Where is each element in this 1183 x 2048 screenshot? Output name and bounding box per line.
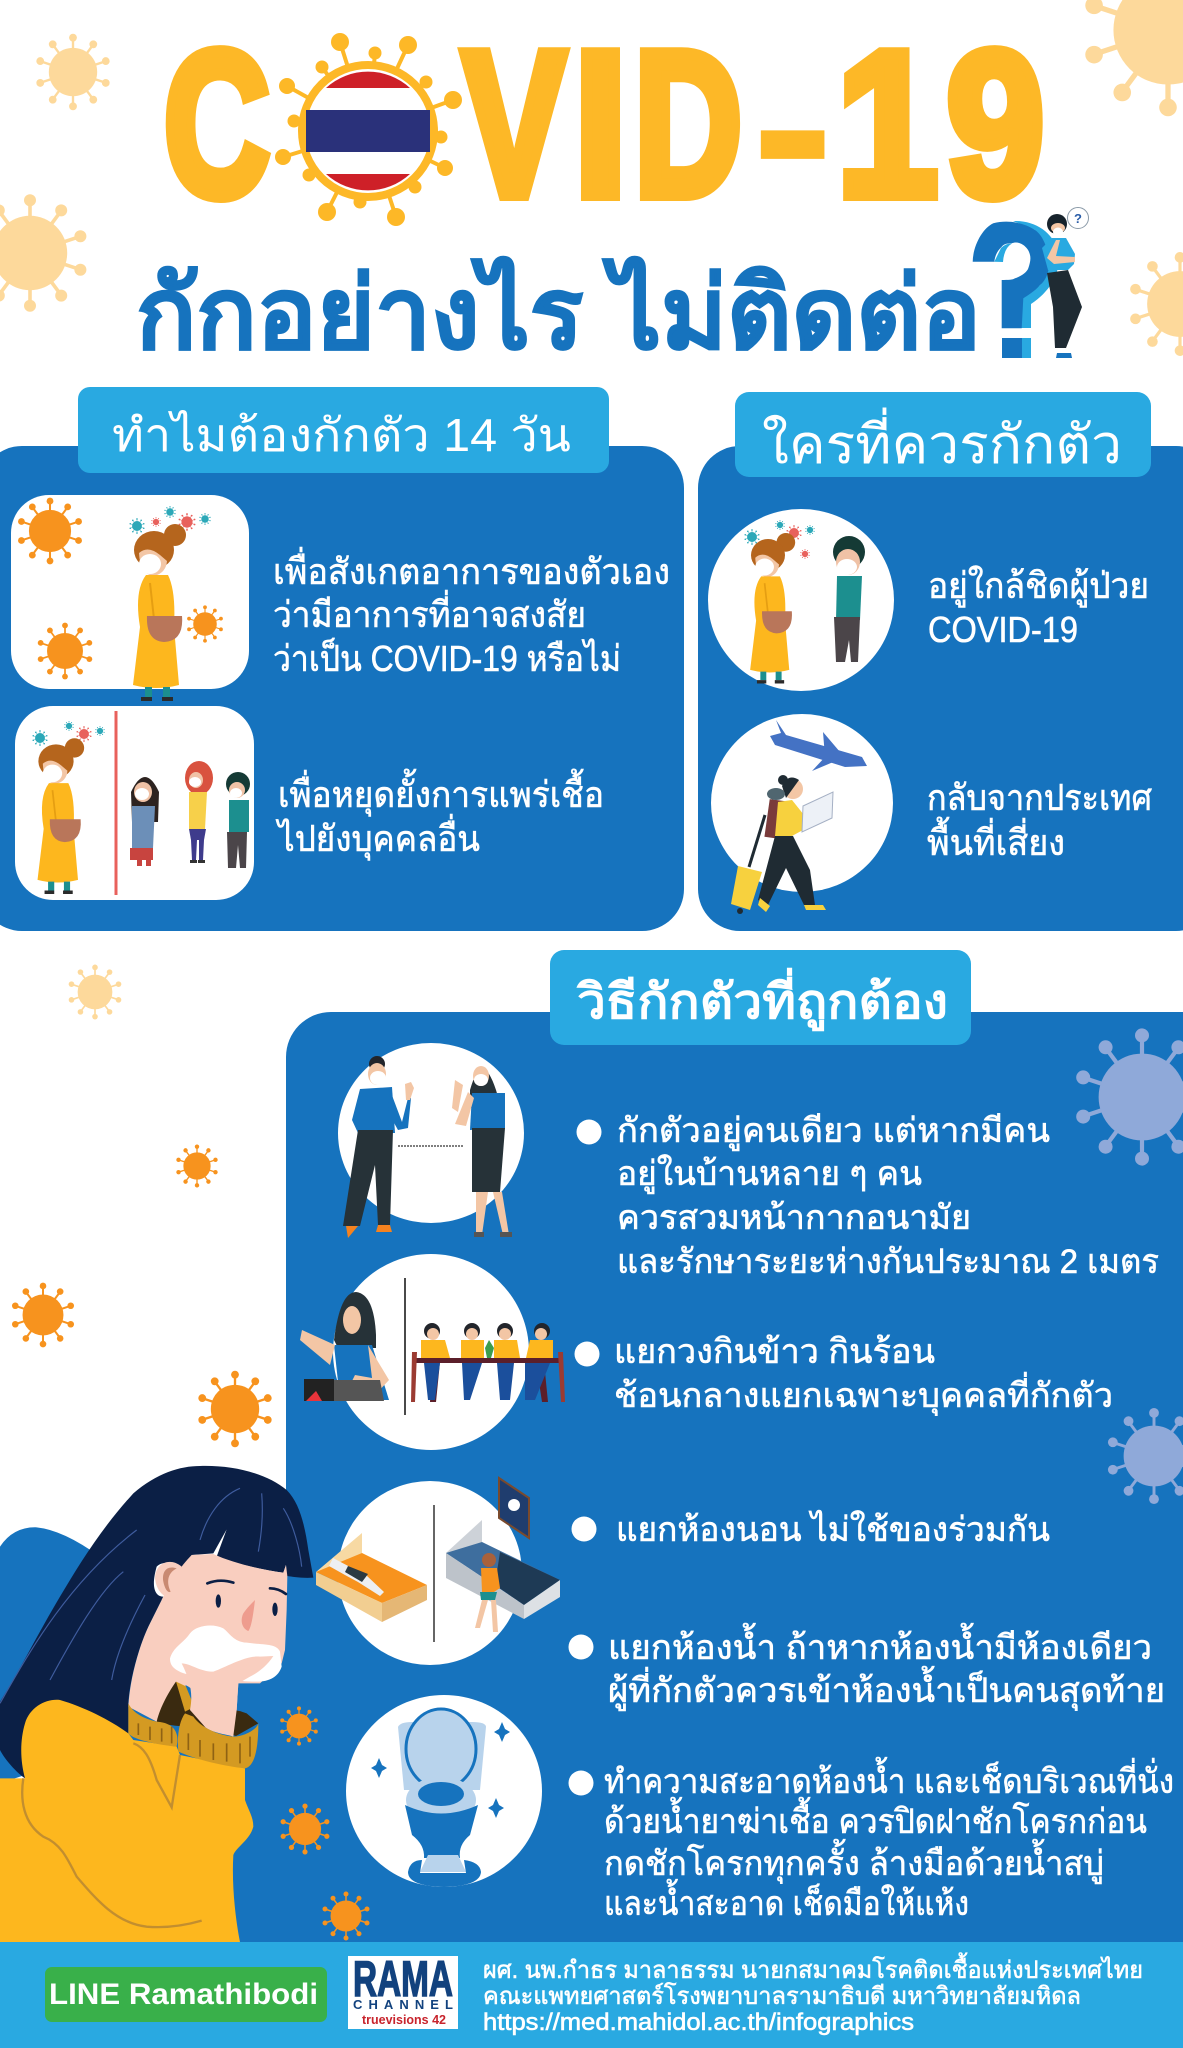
text: return from risk area: กลับจากประเทศ (927, 777, 1152, 818)
text: stop spread: เพื่อหยุดยั้งการแพร่เชื้อ (278, 768, 604, 817)
text: stay alone: และรักษาระยะห่างกันประมาณ 2 เมตร (617, 1243, 1159, 1281)
text: stay alone (576, 1112, 1159, 1281)
icon circle: close contact (708, 509, 894, 691)
icon: question mark and woman (973, 208, 1088, 358)
logo: Rama Channel: CHANNEL (353, 1997, 453, 2012)
text: observe symptoms: เพื่อสังเกตอาการของตัวเอง (273, 547, 670, 592)
figure: cooking woman (300, 1292, 389, 1401)
text: clean bathroom: กดชักโครกทุกครั้ง ล้างมือด้วยน้ำสบู่ (604, 1839, 1104, 1884)
figure: traveller (731, 775, 833, 914)
figure: woman (452, 1066, 512, 1237)
title: COVID-19 (164, 9, 1044, 242)
panel: why quarantine 14 days (0, 387, 684, 931)
text: separate bathroom (568, 1623, 1165, 1711)
text: stay alone: ควรสวมหน้ากากอนามัย (617, 1199, 971, 1237)
figure: man (343, 1056, 414, 1238)
button: LINE Ramathibodi (45, 1967, 327, 2022)
icon: right bed (446, 1520, 560, 1619)
text: stay alone: อยู่ในบ้านหลาย ๆ คน (617, 1154, 922, 1194)
text: close to patient: อยู่ใกล้ชิดผู้ป่วย (928, 565, 1149, 608)
title: COVID-19: 9 (947, 9, 1044, 239)
icon circle: distancing (338, 1043, 524, 1238)
title: COVID-19: C (164, 9, 270, 239)
text: separate bathroom: ผู้ที่กักตัวควรเข้าห้องน้ำเป็นคนสุดท้าย (608, 1666, 1165, 1711)
figure: person curly (185, 761, 213, 863)
figure group: people at table (411, 1323, 565, 1402)
icon: Thai flag virus (275, 33, 462, 226)
text: stay alone: กักตัวอยู่คนเดียว แต่หากมีคน (617, 1112, 1050, 1151)
nose (242, 1600, 255, 1631)
title: COVID-19: - (754, 12, 832, 242)
text: return from risk area: พื้นที่เสี่ยง (927, 816, 1065, 863)
text: clean bathroom: ด้วยน้ำยาฆ่าเชื้อ ควรปิดฝาชักโครกก่อน (604, 1797, 1147, 1841)
heading: why 14 days: ทำไมต้องกักตัว 14 วัน (112, 409, 571, 461)
text: credits (483, 1952, 1143, 2036)
logo: Rama Channel: RAMA (353, 1951, 453, 2007)
icon circle: separate bedrooms (316, 1478, 560, 1665)
heading: who: ใครที่ควรกักตัว (762, 407, 1122, 475)
icon: picture frame (499, 1478, 529, 1538)
text: stop spread: ไปยังบุคคลอื่น (275, 814, 480, 861)
icon: question mark and woman: ? (1074, 211, 1082, 226)
text: credits: ผศ. นพ.กำธร มาลาธรรม นายกสมาคมโรคติดเชื้อแห่งประเทศไทย (483, 1952, 1143, 1984)
text: credits: https://med.mahidol.ac.th/infographics (483, 2009, 914, 2036)
hair strands (0, 1488, 302, 1703)
card: woman separated from others (15, 706, 254, 900)
figure: person striped (130, 777, 159, 866)
text: credits: คณะแพทยศาสตร์โรงพยาบาลรามาธิบดี มหาวิทยาลัยมหิดล (483, 1982, 1081, 2010)
face and neck (128, 1554, 287, 1737)
title: COVID-19: D (634, 9, 742, 239)
icon: plane (770, 720, 867, 771)
footer (0, 1942, 1183, 2048)
ear (155, 1562, 182, 1597)
panel: correct quarantine method (100, 950, 1183, 1942)
figure: girl by bed (475, 1553, 500, 1632)
icon circle: separate meals (300, 1254, 565, 1450)
icon circle: traveller and plane (711, 714, 893, 914)
title: COVID-19: I (574, 9, 627, 239)
heading: who (735, 392, 1151, 477)
text: return from risk area (927, 777, 1152, 863)
panel: who should quarantine (698, 392, 1183, 931)
text: close to patient (928, 565, 1149, 650)
hair (0, 1466, 313, 1778)
hand (182, 1656, 273, 1736)
text: observe symptoms (273, 547, 670, 679)
text: stop spread (275, 768, 604, 861)
figure: sick woman with mask (0, 1466, 313, 1942)
icon circle: toilet (346, 1695, 542, 1887)
eyes and brows (207, 1581, 286, 1594)
text: clean bathroom (568, 1757, 1174, 1923)
title: COVID-19: 1 (837, 9, 938, 239)
text: separate bedrooms: แยกห้องนอน ไม่ใช้ของร่วมกัน (616, 1510, 1050, 1549)
background viruses (0, 0, 1183, 1447)
button: LINE Ramathibodi: LINE Ramathibodi (49, 1978, 318, 2011)
collar (128, 1703, 178, 1747)
subtitle: กักอย่างไร ไม่ติดต่อ (136, 257, 981, 370)
mask (170, 1626, 282, 1682)
card: woman with viruses (11, 495, 249, 701)
orange viruses on panel (280, 1706, 370, 1940)
figure: boy with mask (833, 536, 865, 662)
heading: correct method: วิธีกักตัวที่ถูกต้อง (576, 967, 948, 1032)
logo: Rama Channel (348, 1951, 458, 2029)
decorative light blue viruses (1076, 1028, 1183, 1504)
text: clean bathroom: และน้ำสะอาด เช็ดมือให้แห้ง (604, 1879, 969, 1923)
logo: Rama Channel: truevisions 42 (362, 2012, 446, 2027)
text: observe symptoms: ว่ามีอาการที่อาจสงสัย (273, 590, 586, 635)
figure: person teal shirt (226, 772, 250, 868)
text: separate meals (574, 1333, 1113, 1416)
text: separate bathroom: แยกห้องน้ำ ถ้าหากห้องน้ำมีห้องเดียว (608, 1623, 1152, 1667)
sweater folds (22, 1743, 202, 1927)
heading: correct method (550, 950, 971, 1045)
text: separate meals: แยกวงกินข้าว กินร้อน (614, 1333, 935, 1371)
text: separate meals: ช้อนกลางแยกเฉพาะบุคคลที่กักตัว (614, 1372, 1113, 1416)
collar inner (157, 1682, 203, 1727)
title: COVID-19: V (462, 9, 566, 239)
text: observe symptoms: ว่าเป็น COVID-19 หรือไม่ (273, 636, 621, 679)
heading: why 14 days (78, 387, 609, 473)
blue bump behind the woman (0, 1527, 100, 1783)
text: close to patient: COVID-19 (928, 609, 1078, 650)
icon: left bed (316, 1533, 427, 1622)
sweater (0, 1700, 253, 1942)
